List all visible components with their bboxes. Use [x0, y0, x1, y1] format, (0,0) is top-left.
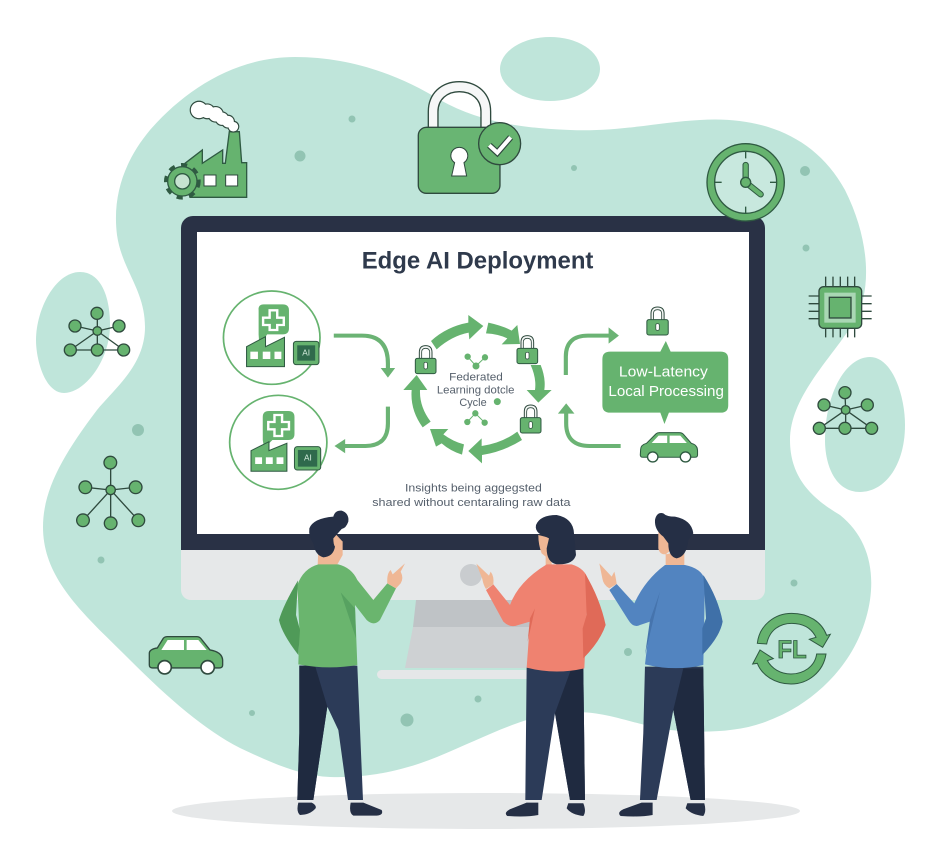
caption: insights [372, 482, 571, 509]
icon: car [149, 637, 223, 674]
lock: processing [647, 307, 668, 335]
arrow: from car to cycle [558, 403, 621, 446]
icon: FL recycle: FL [777, 637, 807, 664]
arrow: to lock and processing [566, 327, 619, 375]
legs and shoes [619, 667, 705, 816]
cycle label: Cycle [459, 397, 487, 409]
icon: network left top [64, 307, 130, 356]
title: Edge AI Deployment [362, 248, 593, 275]
person 1: green sweater [279, 511, 405, 816]
decorative dots [98, 116, 810, 726]
cycle label: Learning dotcle [437, 385, 514, 397]
edge node: hospital and factory 1 [223, 291, 320, 384]
caption: insights: shared without centaraling raw data [372, 497, 571, 509]
lock: cycle left [415, 346, 436, 374]
person 2: coral sweater [476, 515, 606, 816]
edge node: hospital and factory 1: AI [302, 348, 310, 357]
callout: low-latency local processing: Local Processing [608, 384, 724, 400]
federated learning cycle [403, 315, 552, 463]
cycle label: Federated [449, 372, 503, 384]
callout: low-latency local processing: Low-Latency [619, 365, 709, 381]
upper body [599, 513, 723, 668]
caption: insights: Insights being aggegsted [405, 482, 542, 494]
edge node: hospital and factory 2: AI [304, 454, 312, 463]
icon: car on screen [640, 433, 698, 462]
icon: network right [813, 387, 878, 434]
icon: FL recycle [753, 613, 830, 684]
arrow: cycle to node 2 [334, 407, 388, 453]
upper body [476, 515, 606, 671]
cycle label [437, 372, 514, 409]
screen content [223, 248, 728, 509]
icon: microchip [809, 277, 872, 337]
icon: factory with gear [166, 101, 247, 197]
lock: cycle bottom right [520, 405, 541, 433]
edge node: hospital and factory 2 [230, 395, 327, 489]
callout: low-latency local processing [602, 341, 728, 424]
monitor [181, 216, 765, 679]
icon: clock [707, 144, 784, 221]
background blobs [36, 37, 905, 777]
person 3: blue sweater [599, 513, 723, 816]
upper body [279, 511, 405, 667]
legs and shoes [506, 668, 585, 816]
icon: padlock with checkmark [418, 82, 521, 193]
legs and shoes [297, 666, 382, 816]
cycle arrows [403, 315, 552, 463]
icon: network left bottom [77, 456, 145, 530]
lock: cycle top right [517, 336, 538, 364]
network motifs in cycle centre [465, 354, 500, 425]
ground shadow [172, 793, 800, 829]
arrow: node 1 to cycle [334, 336, 395, 378]
